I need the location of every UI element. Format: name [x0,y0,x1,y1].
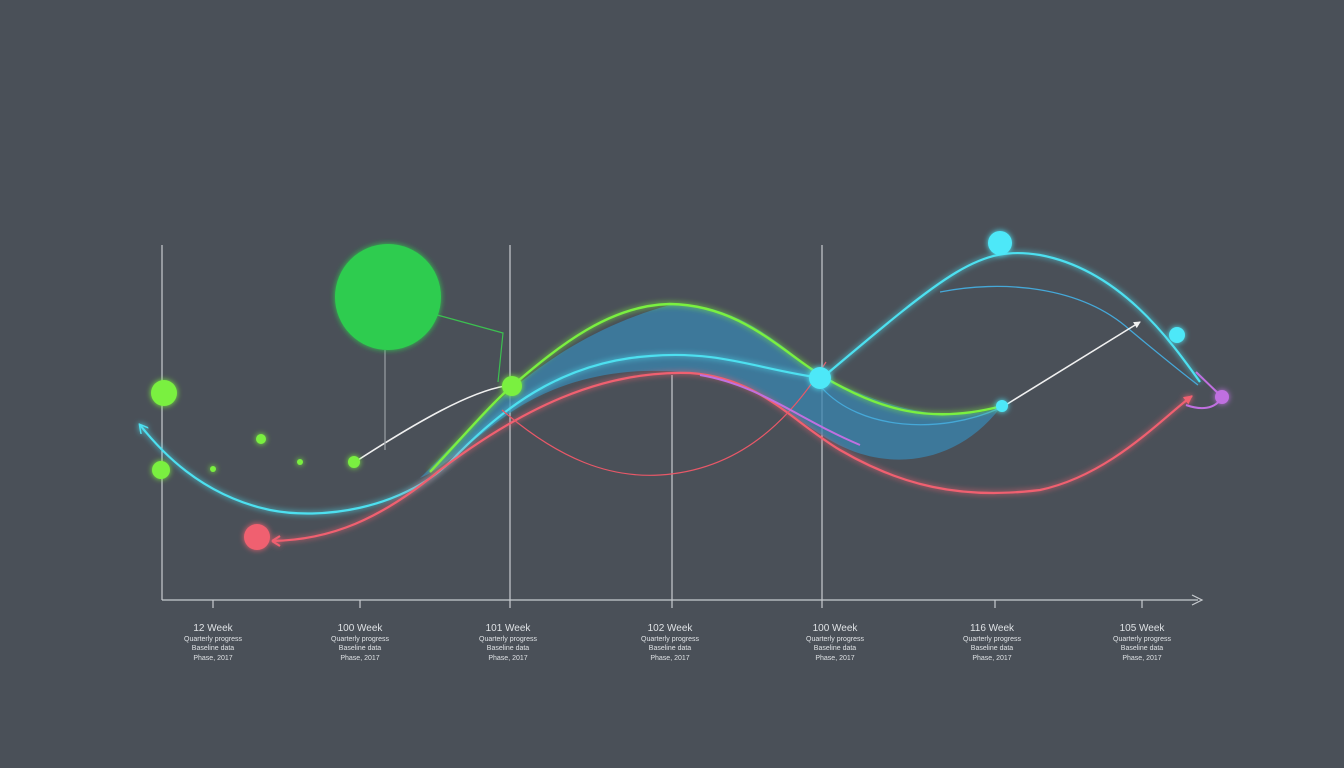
labels: 12 Week [193,623,234,634]
labels: 100 Week [338,623,383,634]
labels: 100 Week [813,623,858,634]
labels: Quarterly progress [479,636,537,643]
axes [162,245,1202,608]
labels: 105 Week [1120,623,1165,634]
labels: Baseline data [1121,645,1163,652]
curve: purple [700,372,1222,445]
labels: Quarterly progress [331,636,389,643]
curve: red [272,373,1192,546]
labels: Phase, 2017 [340,655,380,662]
labels: Baseline data [192,645,234,652]
labels: Baseline data [814,645,856,652]
labels: Quarterly progress [1113,636,1171,643]
labels: Phase, 2017 [815,655,855,662]
blue band fill [420,305,1000,478]
labels: 116 Week [970,623,1015,634]
curve: thin blue [822,286,1198,425]
labels: 101 Week [486,623,531,634]
connector from big circle [385,313,503,450]
labels: Phase, 2017 [972,655,1012,662]
curve: green [430,304,1002,472]
labels: Quarterly progress [641,636,699,643]
labels: Phase, 2017 [193,655,233,662]
labels [184,623,1171,662]
arrows: white [355,322,1140,462]
labels: Baseline data [649,645,691,652]
labels: Quarterly progress [806,636,864,643]
labels: 102 Week [648,623,693,634]
labels: Baseline data [339,645,381,652]
labels: Quarterly progress [963,636,1021,643]
curve: thin red [502,362,826,475]
labels: Phase, 2017 [488,655,528,662]
dots: other [244,231,1229,550]
curve: cyan [140,253,1200,514]
labels: Quarterly progress [184,636,242,643]
labels: Baseline data [971,645,1013,652]
labels: Phase, 2017 [650,655,690,662]
dots: green [151,244,522,479]
labels: Baseline data [487,645,529,652]
labels: Phase, 2017 [1122,655,1162,662]
